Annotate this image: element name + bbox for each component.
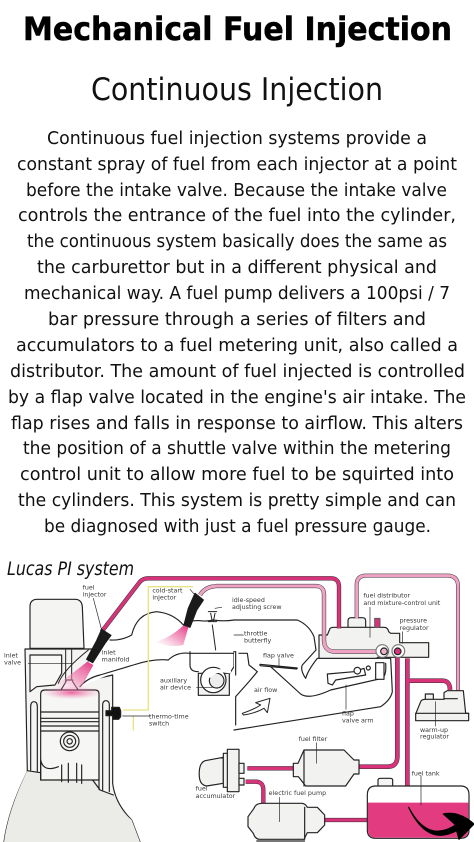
right leader lines and labels: fuel filter [299, 736, 328, 743]
body text: constant spray of fuel from each injector at a point [17, 154, 457, 175]
left leader lines and labels: auxiliary [160, 678, 187, 685]
left leader lines and labels: accumulator [196, 793, 236, 800]
left leader lines and labels: switch [149, 720, 169, 727]
body text [8, 128, 466, 537]
right leader lines and labels: fuel tank [412, 771, 440, 778]
body text: the continuous system basically does the same as [27, 231, 447, 252]
fuel injector spray [55, 662, 93, 689]
air intake body [234, 620, 392, 730]
subtitle: Continuous Injection [91, 72, 383, 108]
fuel tank [367, 778, 469, 838]
cold-start feed pipe [234, 586, 384, 652]
right leader lines and labels: warm-up [420, 727, 448, 734]
auxiliary air device [190, 652, 234, 695]
right leader lines and labels: valve arm [342, 717, 374, 724]
body text: control unit to allow more fuel to be squirted into [20, 464, 454, 485]
piston [31, 686, 109, 792]
body text: the position of a shuttle valve within the metering [23, 438, 451, 459]
right leader lines and labels: flap valve [263, 652, 294, 659]
cold-start injector spray [157, 625, 188, 646]
electric fuel pump [248, 803, 325, 841]
throttle adjusting screw [208, 612, 217, 650]
accumulator to filter pipe [247, 762, 295, 775]
accumulator end [227, 749, 244, 792]
left leader lines and labels: valve [4, 660, 21, 667]
left leader lines and labels: air device [160, 685, 191, 692]
right leader lines and labels: fuel distributor [363, 593, 411, 600]
cold-start fuel pipe [200, 586, 234, 595]
filter to distributor pipe [359, 652, 397, 767]
right leader lines and labels: throttle [244, 630, 268, 637]
left leader lines and labels: inlet [102, 649, 116, 656]
left leader lines and labels: fuel [196, 786, 208, 793]
right leader lines and labels: electric fuel pump [269, 790, 326, 797]
regulator connection rings [376, 645, 405, 657]
fuel injector [87, 629, 111, 663]
warm-up return pipe [357, 576, 458, 692]
left leader lines and labels: inlet [4, 652, 18, 659]
body text: the carburettor but in a different physical and [37, 257, 437, 278]
fuel distributor unit [319, 618, 429, 658]
main pipe [234, 578, 339, 628]
diagram: right half, metering and fuel supply [227, 576, 474, 841]
warm-up regulator [416, 691, 469, 721]
right leader lines and labels: flap [342, 710, 354, 717]
thermo-time switch [106, 707, 121, 719]
body text: the cylinders. This system is pretty simple and can [18, 490, 456, 511]
body text: accumulators to a fuel metering unit, also called a [16, 335, 458, 356]
right leader lines and labels: regulator [420, 734, 449, 741]
left leader lines and labels: injector [83, 592, 107, 599]
cold-start injector [184, 593, 203, 627]
yellow wiring [123, 587, 193, 730]
diagram caption: Lucas PI system [7, 559, 134, 580]
flap valve [260, 664, 297, 669]
left leader lines and labels: cold-start [152, 588, 183, 595]
pump to tank pipe [324, 813, 368, 826]
accumulator to pump pipe [246, 782, 263, 804]
left leader lines and labels: thermo-time [149, 713, 189, 720]
body text: be diagnosed with just a fuel pressure gauge. [44, 516, 431, 537]
body text: mechanical way. A fuel pump delivers a 100psi / 7 [24, 283, 450, 304]
right leader lines and labels: and mixture-control unit [363, 600, 441, 607]
right leader lines and labels: idle-speed [232, 597, 265, 604]
main fuel pipe [102, 578, 234, 632]
body text: bar pressure through a series of filters and [48, 309, 426, 330]
right leader lines and labels: adjusting screw [232, 604, 282, 611]
engine block [4, 599, 140, 842]
body text: Continuous fuel injection systems provide a [47, 128, 427, 149]
left leader lines and labels: manifold [102, 656, 129, 663]
fuel filter [293, 750, 359, 786]
right leader lines and labels: regulator [400, 625, 429, 632]
body text: controls the entrance of the fuel into the cylinder, [18, 205, 456, 226]
left leader lines and labels [4, 584, 236, 800]
flap valve arm [327, 663, 384, 685]
tank return pipe [407, 658, 450, 803]
right leader lines and labels: pressure [400, 618, 427, 625]
inlet manifold [58, 612, 234, 687]
body text: before the intake valve. Because the intake valve [26, 180, 447, 201]
diagram: left half, engine and injectors [4, 578, 236, 842]
body text: by a flap valve located in the engine's air intake. The [8, 387, 466, 408]
fuel accumulator [199, 753, 233, 787]
body text: distributor. The amount of fuel injected is controlled [10, 361, 465, 382]
left leader lines and labels: injector [152, 595, 177, 602]
black arrow [409, 807, 474, 839]
left leader lines and labels: fuel [83, 584, 95, 591]
right leader lines and labels: butterfly [244, 638, 271, 645]
right leader lines and labels: air flow [254, 687, 277, 694]
air flow arrow [242, 698, 270, 715]
right leader lines and labels [232, 593, 449, 822]
body text: flap rises and falls in response to airflow. This alters [11, 413, 463, 434]
title: Mechanical Fuel Injection [23, 10, 452, 48]
